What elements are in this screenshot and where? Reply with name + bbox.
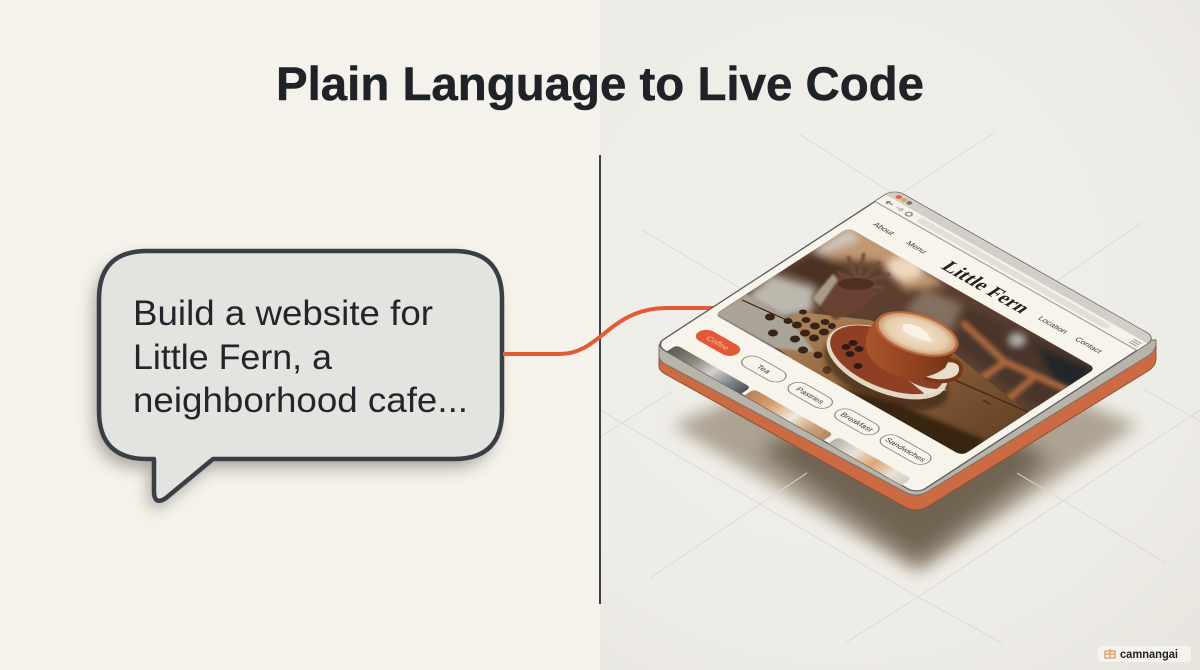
saucer [822, 324, 950, 412]
site logo: Little Fern: Little Fern [936, 258, 1037, 317]
floating browser device [651, 189, 1156, 510]
category pill: Coffee: Coffee [704, 335, 732, 352]
plant pot [812, 253, 890, 320]
prompt text: Little Fern, a [133, 337, 332, 377]
browser chrome tab strip [875, 189, 1156, 351]
category pill: Pastries [784, 380, 837, 411]
category pill: Breakfast: Breakfast [838, 411, 876, 433]
category pill: Tea: Tea [754, 364, 773, 375]
coffee cup [866, 311, 963, 394]
device side: silver band [659, 340, 1156, 495]
blurred chair [962, 322, 1072, 402]
panel: left paper background [0, 0, 600, 670]
blurred cafe background [745, 222, 1100, 410]
category pill: Tea [737, 353, 790, 385]
device side: orange base [659, 340, 1156, 510]
prompt text: neighborhood cafe... [133, 380, 468, 420]
center divider line [599, 155, 601, 604]
watermark icon [1105, 649, 1115, 658]
table surface [776, 312, 1028, 454]
site navigation: Contact [1073, 336, 1105, 355]
browser navigation icons [885, 200, 913, 217]
window control dots [894, 194, 914, 206]
hamburger menu icon [1129, 339, 1141, 347]
site navigation [871, 221, 1105, 355]
category pill: Coffee [691, 327, 745, 359]
site navigation: Location [1036, 315, 1070, 335]
connector line from bubble to browser [503, 308, 715, 354]
category pill: Sandwiches: Sandwiches [883, 437, 928, 463]
coffee beans [765, 310, 836, 374]
speech bubble [94, 251, 502, 509]
category pill: Breakfast [830, 406, 883, 438]
food thumbnails [662, 345, 912, 488]
saucer beans [842, 340, 864, 369]
watermark badge: camnangai [1120, 649, 1178, 661]
title: Plain Language to Live Code [276, 57, 924, 110]
category pill: Pastries: Pastries [793, 386, 826, 405]
device shadow on floor [672, 330, 1138, 572]
browser page surface [651, 189, 1156, 497]
category pill: Sandwiches [876, 432, 935, 467]
watermark badge [1098, 646, 1191, 662]
panel: right floor background [600, 0, 1200, 670]
site navigation: About [871, 221, 897, 237]
prompt text: Build a website for [133, 293, 433, 333]
address bar [915, 217, 1112, 330]
hero photo: latte on wooden table [714, 222, 1100, 460]
site navigation: Menu [904, 240, 929, 255]
